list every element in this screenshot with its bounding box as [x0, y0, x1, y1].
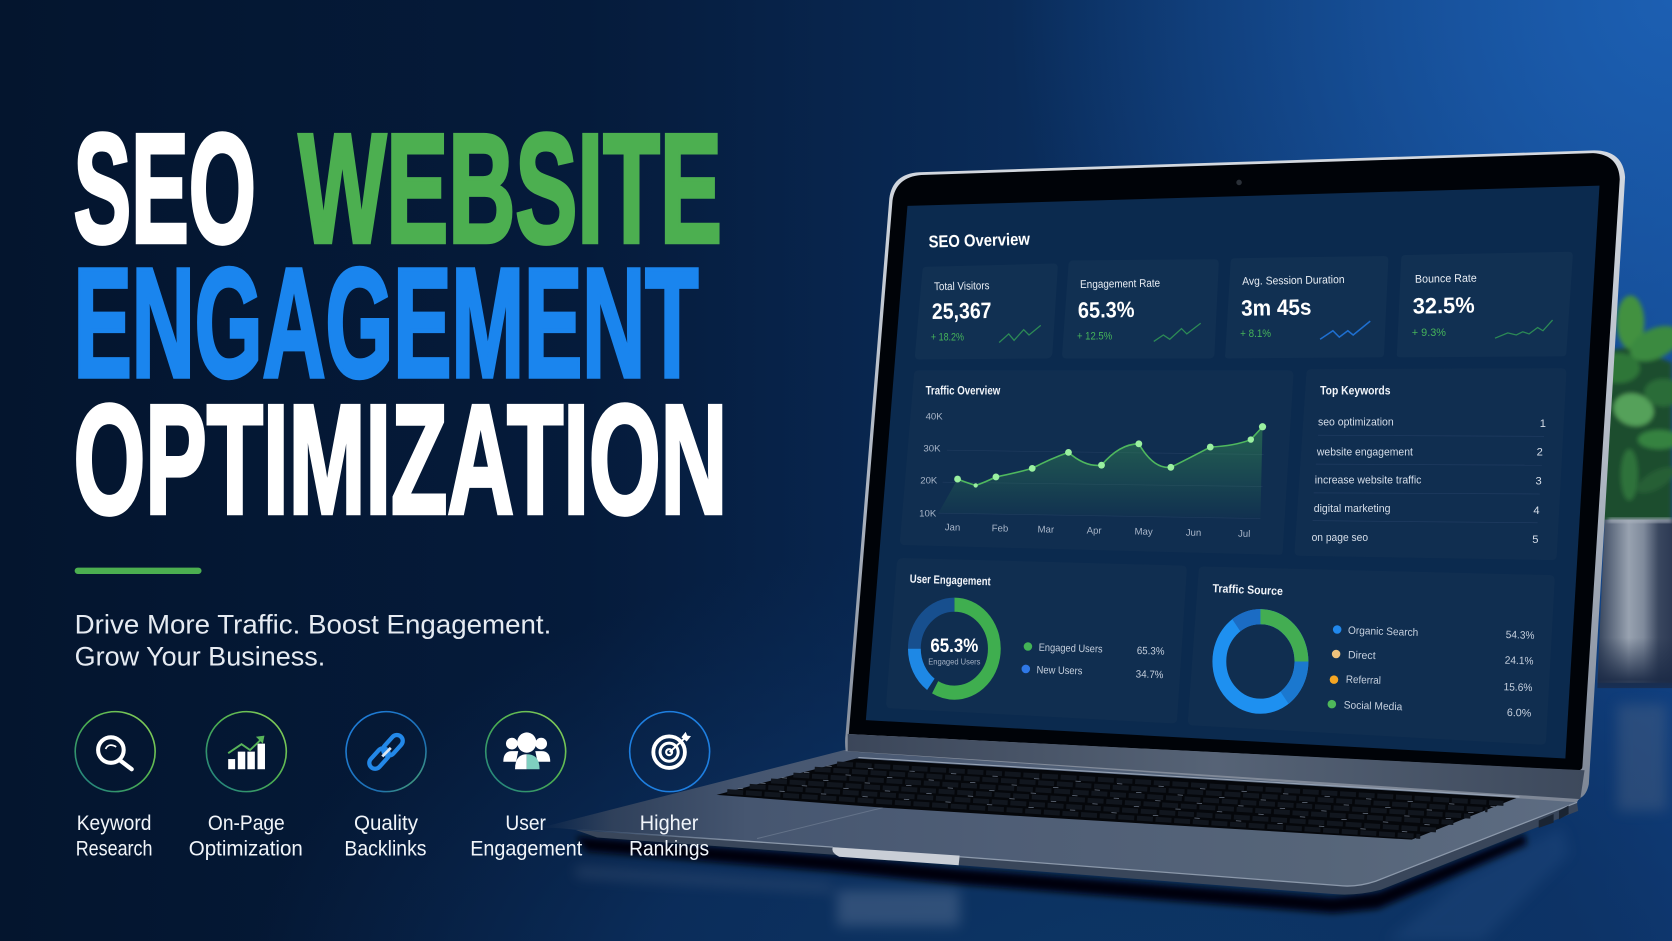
divider accent — [75, 568, 202, 574]
x axis labels — [945, 522, 1250, 540]
plant leaves — [1597, 296, 1672, 523]
panel: top keywords: seo optimization — [1318, 417, 1394, 429]
y axis labels: 10K — [919, 508, 937, 519]
panel: average session duration: + 8.1% — [1240, 328, 1272, 340]
y axis labels: 30K — [923, 443, 941, 454]
traffic source legend: Direct — [1348, 649, 1376, 662]
panel: top keywords: 1 — [1540, 418, 1546, 430]
icon labels: User — [505, 812, 546, 835]
front notch — [832, 847, 960, 865]
panel: top keywords: on page seo — [1312, 532, 1368, 544]
panel: total visitors: Total Visitors — [934, 280, 990, 293]
panel: engagement rate: + 12.5% — [1077, 330, 1113, 342]
panel: traffic overview: Traffic Overview — [926, 385, 1001, 398]
subtitle — [75, 609, 551, 672]
traffic source legend — [1328, 625, 1535, 720]
panel: bounce rate — [1397, 252, 1573, 357]
traffic source legend: Social Media — [1343, 699, 1403, 713]
icon labels: Quality — [354, 812, 419, 835]
x axis labels: Jan — [945, 522, 960, 534]
panel: traffic overview — [900, 370, 1293, 555]
panel: top keywords: digital marketing — [1314, 503, 1390, 515]
x axis labels: May — [1135, 527, 1153, 538]
screen — [866, 186, 1599, 759]
panel: bounce rate: Bounce Rate — [1415, 273, 1477, 286]
title: SEO — [74, 101, 256, 275]
panel: average session duration — [1225, 256, 1388, 358]
panel: engagement rate: 65.3% — [1078, 297, 1135, 323]
panel: bounce rate: + 9.3% — [1412, 327, 1446, 339]
panel: top keywords: 2 — [1537, 447, 1543, 459]
traffic source legend: Organic Search — [1348, 625, 1419, 639]
panel: top keywords: Top Keywords — [1320, 385, 1391, 398]
panel: average session duration: Avg. Session Duration — [1242, 274, 1345, 288]
icon labels: Backlinks — [344, 838, 427, 861]
panel: top keywords: website engagement — [1316, 447, 1414, 459]
icon labels: Keyword — [77, 812, 151, 835]
line chart — [938, 423, 1266, 519]
traffic source donut — [1219, 617, 1301, 706]
y axis labels: 40K — [926, 411, 943, 422]
engagement legend: Engaged Users — [1039, 642, 1103, 655]
panel: traffic source: Traffic Source — [1212, 582, 1284, 598]
y axis labels: 20K — [920, 475, 938, 486]
dashboard title: SEO Overview — [928, 230, 1031, 252]
engagement legend: 34.7% — [1136, 668, 1164, 681]
lid silver edge — [845, 150, 1625, 802]
title: OPTIMIZATION — [74, 372, 727, 546]
title — [74, 101, 727, 546]
subtitle: Drive More Traffic. Boost Engagement. — [75, 609, 551, 640]
panel: total visitors: + 18.2% — [931, 331, 964, 343]
base front bevel — [576, 802, 1578, 895]
panel: user engagement: Engaged Users — [928, 657, 980, 667]
panel: traffic source — [1188, 567, 1555, 745]
grid lines — [938, 450, 1264, 519]
laptop shadow — [576, 834, 1527, 913]
icon labels: Optimization — [189, 838, 303, 861]
x axis labels: Jun — [1186, 528, 1201, 539]
icon labels: Engagement — [470, 838, 582, 861]
webcam — [1236, 180, 1242, 185]
table reflection — [576, 827, 1570, 941]
icon: user engagement — [486, 712, 566, 792]
panel: engagement rate — [1062, 259, 1219, 358]
traffic source legend: 15.6% — [1503, 681, 1533, 694]
icon: on-page optimization — [206, 712, 286, 792]
icon labels: Rankings — [629, 838, 709, 861]
panel: engagement rate: Engagement Rate — [1080, 278, 1160, 291]
x axis labels: Apr — [1087, 525, 1102, 537]
side ports — [1539, 806, 1569, 828]
title: WEBSITE — [299, 101, 722, 275]
icon labels: On-Page — [208, 812, 285, 835]
traffic source legend: Referral — [1346, 674, 1381, 687]
panel: top keywords: 5 — [1532, 534, 1539, 546]
traffic source legend: 54.3% — [1506, 629, 1535, 642]
panel: total visitors — [915, 264, 1058, 360]
laptop base deck — [540, 750, 1578, 886]
engagement legend — [1022, 642, 1165, 681]
panel: user engagement: 65.3% — [930, 636, 978, 657]
keyboard — [717, 757, 1520, 840]
icon: quality backlinks — [346, 712, 426, 792]
x axis labels: Jul — [1238, 529, 1250, 540]
engagement legend: 65.3% — [1137, 645, 1165, 658]
lid bezel — [849, 153, 1620, 770]
icon: keyword research — [75, 712, 155, 792]
trackpad edge — [757, 808, 883, 839]
traffic source legend: 6.0% — [1507, 707, 1532, 720]
engagement donut — [914, 605, 994, 693]
panel: bounce rate: 32.5% — [1413, 293, 1475, 319]
engagement legend: New Users — [1036, 664, 1083, 677]
subtitle: Grow Your Business. — [75, 641, 325, 672]
icon labels: Research — [76, 838, 152, 861]
x axis labels: Feb — [992, 523, 1008, 535]
panel: user engagement: User Engagement — [909, 573, 991, 588]
y axis labels — [919, 411, 943, 519]
traffic source legend: 24.1% — [1504, 655, 1534, 668]
panel: total visitors: 25,367 — [932, 298, 992, 324]
panel: top keywords: 3 — [1536, 475, 1542, 487]
panel: top keywords — [1295, 368, 1566, 560]
laptop — [540, 150, 1625, 941]
panel: top keywords: 4 — [1533, 505, 1540, 517]
panel: average session duration: 3m 45s — [1241, 295, 1312, 321]
panel: top keywords: increase website traffic — [1315, 474, 1422, 486]
icon labels: Higher — [640, 812, 699, 835]
x axis labels: Mar — [1037, 524, 1055, 536]
hinge strip — [848, 734, 1585, 799]
plant and pot — [1597, 296, 1672, 811]
icon labels — [76, 812, 709, 861]
icon: higher rankings — [630, 712, 710, 792]
pot — [1597, 520, 1672, 683]
pot reflection — [1618, 704, 1667, 811]
panel: user engagement — [886, 558, 1187, 723]
title: ENGAGEMENT — [74, 236, 698, 410]
